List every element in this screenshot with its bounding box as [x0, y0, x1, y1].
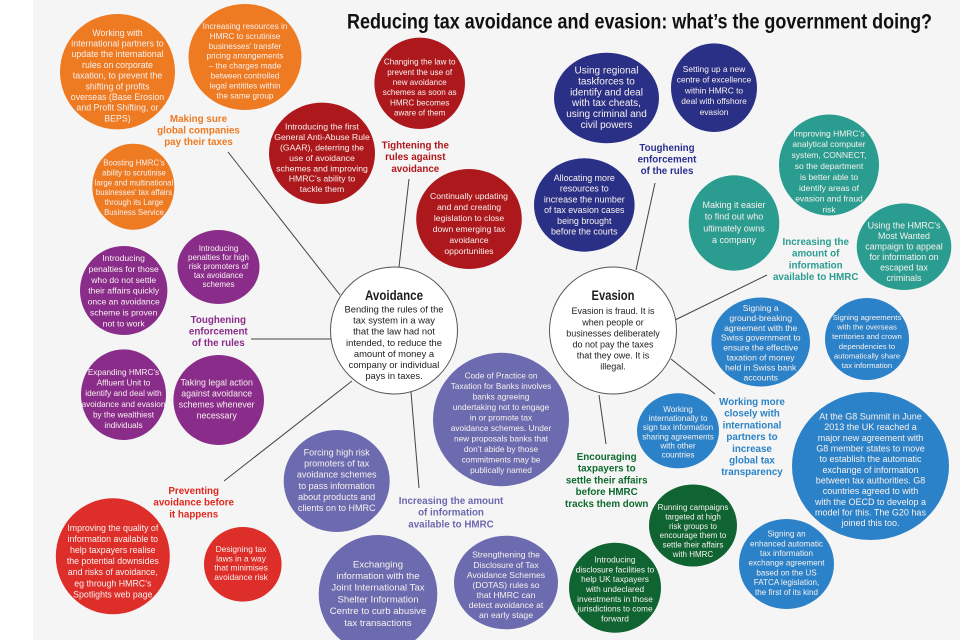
periwinkle bubble: code of practice: banks agreeing — [473, 391, 530, 401]
heading: increasing information (avoidance): of information — [418, 508, 484, 519]
teal bubble: most wanted: escaped tax — [880, 262, 928, 272]
blue bubble: FATCA: based on the US — [756, 568, 817, 577]
blue bubble: swiss agreement: taxation of money — [727, 352, 795, 362]
blue bubble: FATCA: Signing an — [767, 530, 806, 539]
periwinkle bubble: JITSIC: Exchanging — [353, 559, 403, 570]
bright red bubble: designing tax laws: that minimises — [214, 563, 268, 573]
periwinkle bubble: code of practice: Taxation for Banks involves — [451, 381, 551, 391]
central circle: avoidance — [330, 267, 458, 394]
orange bubble: transfer pricing: businesses’ transfer — [209, 42, 282, 51]
blue bubble: overseas territories: with the overseas — [836, 323, 897, 332]
central circle: avoidance: Bending the rules of the — [344, 304, 444, 314]
periwinkle bubble: forcing promoters: avoidance schemes — [297, 470, 377, 480]
central circle: avoidance: pays in taxes. — [365, 370, 423, 381]
heading: tightening the rules against avoidance: avoidance — [391, 164, 440, 175]
heading: working more closely with international partners: closely with — [724, 409, 780, 420]
heading: toughening enforcement (evasion): Toughening — [639, 143, 695, 154]
navy bubble: allocating resources: being brought — [557, 216, 612, 226]
dark red bubble: changing the law: aware of them — [394, 109, 446, 118]
dark red bubble: GAAR: General Anti-Abuse Rule — [274, 132, 370, 142]
green bubble: disclosure facilities: jurisdictions to come — [576, 604, 653, 614]
bright red bubble: designing tax laws: Designing tax — [216, 544, 267, 554]
orange bubble: transfer pricing: Increasing resources in — [203, 22, 288, 31]
purple bubble: legal action: against avoidance — [181, 388, 252, 398]
heading: toughening enforcement (evasion): of the rules — [641, 166, 694, 177]
periwinkle bubble: JITSIC: Shelter Information — [337, 594, 419, 605]
periwinkle bubble: DOTAS: Strengthening the — [472, 550, 540, 560]
heading: toughening enforcement (evasion): enforcement — [638, 155, 697, 166]
dark red bubble: changing the law: new avoidance — [393, 78, 447, 87]
blue bubble: information sharing: sharing agreements — [642, 432, 714, 441]
teal bubble: most wanted — [857, 203, 951, 290]
blue bubble: overseas territories: Signing agreements — [833, 313, 901, 322]
dark red bubble: changing the law: Changing the law to — [384, 58, 456, 67]
purple bubble: affluent unit: by the wealthiest — [93, 410, 155, 419]
heading: increasing information (evasion): amount of — [792, 249, 840, 260]
bright red bubble: designing tax laws: avoidance risk — [214, 572, 269, 582]
central circle: avoidance: amount of money a — [354, 348, 435, 359]
blue bubble: swiss agreement: ensure the effective — [723, 343, 798, 353]
connector: tightening the rules — [399, 179, 409, 267]
navy bubble: regional taskforces — [554, 53, 659, 143]
periwinkle bubble: code of practice: Code of Practice on — [465, 370, 538, 380]
blue bubble: information sharing: with other — [659, 441, 696, 450]
heading: encouraging taxpayers to settle: tracks them down — [565, 499, 648, 510]
heading: preventing avoidance before it happens: Preventing — [168, 486, 219, 497]
blue bubble: information sharing: internationally to — [649, 414, 708, 423]
heading: increasing information (avoidance): Increasing the amount — [399, 496, 504, 507]
central circle: evasion: illegal. — [600, 362, 626, 372]
blue bubble: FATCA: exchange agreement — [748, 559, 825, 568]
heading: making sure global companies pay their taxes: pay their taxes — [164, 137, 233, 148]
orange bubble: transfer pricing: pricing arrangements — [207, 52, 283, 61]
dark red bubble: changing the law — [374, 38, 465, 129]
periwinkle bubble: DOTAS: (DOTAS) rules so — [472, 580, 540, 590]
periwinkle bubble: forcing promoters: clients on to HMRC — [298, 503, 376, 513]
dark red bubble: GAAR: use of avoidance — [289, 153, 355, 163]
central circle: evasion: when people or — [581, 317, 644, 327]
periwinkle bubble: DOTAS: Disclosure of Tax — [473, 560, 539, 570]
heading: encouraging taxpayers to settle: Encouraging — [577, 452, 637, 463]
orange bubble: international rules: BEPS) — [104, 113, 131, 123]
green bubble: disclosure facilities: disclosure facilities to — [576, 564, 655, 574]
periwinkle bubble: code of practice: new proposals banks that — [454, 433, 549, 443]
orange bubble: transfer pricing: the same group — [217, 91, 274, 100]
heading: tightening the rules against avoidance: rules against — [385, 152, 446, 163]
central circle: evasion: that they owe. It is — [577, 351, 650, 361]
teal bubble: connect: risk — [822, 205, 836, 215]
blue bubble: overseas territories: dependencies to — [839, 342, 895, 351]
navy bubble: regional taskforces: using criminal and — [566, 109, 647, 120]
periwinkle bubble: JITSIC: tax transactions — [344, 618, 412, 629]
heading: encouraging taxpayers to settle: settle their affairs — [566, 475, 648, 486]
connector: international partners — [671, 359, 715, 394]
orange bubble: transfer pricing — [188, 4, 302, 110]
blue bubble: overseas territories: tax information — [842, 361, 892, 370]
teal bubble: most wanted: for information on — [869, 252, 939, 262]
purple bubble: affluent unit: Affluent Unit to — [97, 379, 151, 388]
orange bubble: large business service: large and multinational — [95, 178, 173, 187]
heading: toughening enforcement (avoidance): of the rules — [192, 338, 245, 349]
dark red bubble: updating legislation: avoidance — [449, 235, 489, 245]
periwinkle bubble: code of practice: undertaking not to engage — [453, 402, 550, 412]
blue bubble: swiss agreement: ground-breaking — [729, 313, 792, 323]
green bubble: disclosure facilities — [569, 543, 661, 633]
blue bubble: FATCA: the first of its kind — [755, 588, 818, 597]
dark red bubble: GAAR — [269, 103, 375, 204]
blue bubble: overseas territories: territories and crown — [832, 332, 902, 341]
bright red bubble: quality of information: Improving the quality of — [67, 523, 159, 533]
periwinkle bubble: code of practice — [433, 353, 569, 486]
purple bubble: penalties for promoters: penalties for high — [188, 253, 249, 262]
central circle: avoidance: tax system in a way — [353, 315, 435, 326]
heading: working more closely with international partners: increase — [732, 444, 772, 455]
periwinkle bubble: forcing promoters: promoters of tax — [304, 459, 370, 469]
connector: encouraging taxpayers — [599, 395, 606, 444]
orange bubble: transfer pricing: legal entitites within — [210, 81, 281, 90]
periwinkle bubble: JITSIC: Joint International Tax — [331, 583, 425, 594]
green bubble: disclosure facilities: investments in those — [577, 594, 653, 604]
orange bubble: international rules — [60, 14, 175, 129]
purple bubble: penalties for promoters: Introducing — [199, 244, 238, 253]
dark red bubble: GAAR: tackle them — [300, 184, 344, 194]
orange bubble: transfer pricing: – the charges made — [209, 62, 282, 71]
dark red bubble: GAAR: (GAAR), deterring the — [280, 142, 364, 152]
bright red bubble: quality of information: Spotlights web page — [73, 589, 153, 599]
bright red bubble: quality of information: and risks of avoidance, — [68, 567, 158, 577]
connector: toughening enforcement evasion — [636, 183, 655, 270]
connector: preventing avoidance — [224, 381, 352, 481]
navy bubble: regional taskforces: civil powers — [581, 120, 632, 131]
purple bubble: affluent unit: individuals — [104, 421, 143, 430]
navy bubble: regional taskforces: taskforces to — [578, 76, 635, 87]
dark red bubble: updating legislation: and and creating — [437, 202, 501, 212]
central circle: evasion: Evasion — [592, 288, 634, 303]
dark red bubble: changing the law: prevent the use of — [387, 68, 453, 77]
orange bubble: international rules: shifting of profits — [85, 81, 150, 91]
orange bubble: large business service — [92, 144, 174, 230]
navy bubble: regional taskforces: with tax cheats, — [571, 98, 641, 109]
green bubble: disclosure facilities: forward — [601, 613, 629, 623]
teal bubble: ownership — [689, 175, 779, 271]
bright red bubble: quality of information: help taxpayers realise — [70, 545, 156, 555]
teal bubble: connect: system, CONNECT, — [791, 150, 867, 160]
blue bubble: information sharing — [637, 393, 719, 468]
blue bubble: overseas territories: automatically share — [834, 351, 900, 360]
purple bubble: affluent unit: identify and deal with — [85, 389, 162, 398]
teal bubble: connect: is better able to — [800, 172, 858, 182]
periwinkle bubble: DOTAS: that HMRC can — [477, 590, 536, 600]
dark red bubble: updating legislation: Continually updating — [430, 191, 508, 201]
green bubble: disclosure facilities: Introducing — [594, 555, 636, 565]
teal bubble: connect: analytical computer — [792, 139, 866, 149]
orange bubble: large business service: Boosting HMRC’s — [103, 158, 165, 168]
blue bubble: information sharing: countries — [662, 450, 694, 460]
navy bubble: allocating resources: Allocating more — [554, 173, 615, 183]
purple bubble: penalties for promoters: schemes — [202, 280, 235, 289]
periwinkle bubble: forcing promoters: to pass information — [299, 481, 375, 491]
periwinkle bubble: code of practice: in or promote tax — [470, 412, 533, 422]
green bubble: campaigns: with HMRC — [672, 550, 713, 559]
heading: working more closely with international partners: international — [723, 420, 782, 431]
dark red bubble: updating legislation: legislation to close — [434, 213, 504, 223]
periwinkle bubble: code of practice: commitments may be — [462, 454, 541, 464]
blue bubble: G8 summit: between tax authorities. G8 — [816, 476, 925, 486]
purple bubble: legal action: necessary — [197, 410, 237, 420]
navy bubble: centre of excellence: deal with offshore — [681, 96, 747, 106]
connector: increasing information avoidance — [411, 392, 419, 488]
blue bubble: G8 summit: At the G8 Summit in June — [819, 412, 922, 422]
connector: making sure global companies — [228, 152, 340, 295]
orange bubble: international rules: Working with — [92, 28, 143, 38]
purple bubble: legal action: Taking legal action — [181, 377, 253, 387]
blue bubble: G8 summit: joined this too. — [840, 518, 900, 528]
heading: preventing avoidance before it happens: avoidance before — [153, 498, 235, 509]
teal bubble: connect: Improving HMRC’s — [793, 128, 865, 138]
blue bubble: G8 summit: exchange of information — [822, 465, 919, 475]
heading: making sure global companies pay their taxes: Making sure — [170, 114, 228, 125]
bright red bubble: quality of information — [56, 498, 170, 614]
green bubble: disclosure facilities: with undeclared — [585, 584, 644, 594]
green bubble: campaigns: targeted at high — [665, 512, 721, 521]
orange bubble: international rules: rules on corporate — [82, 60, 153, 70]
blue bubble: G8 summit: countries agreed to with — [823, 486, 918, 496]
purple bubble: penalties for not settling: once an avoidance — [88, 297, 160, 307]
blue bubble: G8 summit: major new agreement with — [818, 433, 923, 443]
navy bubble: centre of excellence: Setting up a new — [683, 64, 746, 74]
teal bubble: most wanted: Most Wanted — [878, 231, 930, 241]
dark red bubble: changing the law: schemes as soon as — [383, 88, 457, 97]
bright red bubble: quality of information: eg through HMRC’s — [74, 578, 152, 588]
heading: preventing avoidance before it happens: it happens — [169, 509, 219, 520]
blue bubble: FATCA: tax information — [760, 549, 813, 558]
blue bubble: G8 summit: to establish the automatic — [819, 454, 922, 464]
green bubble: campaigns: settle their affairs — [663, 541, 723, 550]
orange bubble: international rules: and Profit Shifting, or — [76, 103, 159, 113]
blue bubble: information sharing: sign tax information — [643, 423, 713, 432]
teal bubble: ownership: ultimately owns — [703, 223, 765, 233]
purple bubble: affluent unit: avoidance and evasion — [82, 400, 166, 409]
blue bubble: G8 summit — [792, 392, 949, 540]
navy bubble: centre of excellence: centre of excellence — [677, 75, 752, 85]
green bubble: disclosure facilities: help UK taxpayers — [581, 574, 649, 584]
blue bubble: swiss agreement: agreement with the — [724, 323, 797, 333]
central circle: evasion: Evasion is fraud. It is — [571, 306, 655, 316]
purple bubble: penalties for not settling: scheme is proven — [90, 308, 158, 318]
purple bubble: penalties for not settling: not to work — [103, 318, 145, 328]
purple bubble: penalties for promoters: tax avoidance — [194, 271, 244, 280]
teal bubble: ownership: to find out who — [705, 212, 763, 222]
connector: increasing information evasion — [675, 275, 767, 320]
blue bubble: swiss agreement: Swiss government to — [721, 333, 801, 343]
teal bubble: most wanted: campaign to appeal — [865, 242, 943, 252]
navy bubble: allocating resources — [534, 158, 635, 252]
blue bubble: G8 summit: model for this. The G20 has — [815, 508, 926, 518]
heading: toughening enforcement (avoidance): enforcement — [189, 326, 248, 338]
teal bubble: connect: so the department — [795, 161, 864, 171]
heading: increasing information (avoidance): available to HMRC — [408, 519, 494, 530]
heading: working more closely with international partners: global tax — [729, 456, 775, 466]
navy bubble: centre of excellence: evasion — [700, 107, 729, 117]
teal bubble: ownership: a company — [712, 235, 757, 245]
blue bubble: information sharing: Working — [663, 405, 693, 414]
purple bubble: affluent unit — [81, 349, 166, 440]
purple bubble: penalties for not settling: their affairs quickly — [88, 286, 160, 296]
blue bubble: G8 summit: with the OECD to develop a — [814, 497, 926, 507]
dark red bubble: changing the law: HMRC becomes — [390, 98, 449, 107]
orange bubble: large business service: through its Large — [105, 198, 163, 207]
heading: working more closely with international partners: partners to — [726, 432, 778, 443]
orange bubble: large business service: Business Service — [104, 208, 164, 217]
teal bubble: most wanted: Using the HMRC’s — [868, 220, 941, 230]
navy bubble: centre of excellence: within HMRC to — [684, 85, 743, 95]
central circle: avoidance: Avoidance — [365, 288, 423, 303]
purple bubble: affluent unit: Expanding HMRC’s — [88, 368, 159, 377]
navy bubble: centre of excellence — [671, 43, 757, 132]
purple bubble: legal action — [173, 355, 264, 445]
dark red bubble: updating legislation: opportunities — [444, 246, 494, 256]
blue bubble: swiss agreement: accounts — [743, 372, 778, 382]
periwinkle bubble: forcing promoters: Forcing high risk — [304, 448, 370, 458]
orange bubble: international rules: taxation, to prevent the — [73, 71, 162, 81]
bright red bubble: designing tax laws — [204, 527, 282, 602]
periwinkle bubble: code of practice: avoidance schemes. Under — [451, 423, 552, 433]
periwinkle bubble: DOTAS — [454, 536, 558, 629]
navy bubble: allocating resources: of tax evasion cases — [544, 205, 625, 215]
connector: toughening enforcement avoidance — [251, 338, 331, 340]
green bubble: campaigns: encourage them to — [660, 531, 727, 540]
green bubble: campaigns: risk groups to — [669, 522, 718, 531]
heading: encouraging taxpayers to settle: before HMRC — [576, 487, 638, 498]
navy bubble: allocating resources: before the courts — [551, 226, 618, 236]
navy bubble: allocating resources: resources to — [560, 184, 609, 194]
central circle: avoidance: intended, to reduce the — [346, 337, 442, 348]
heading: tightening the rules against avoidance: Tightening the — [382, 140, 449, 152]
periwinkle bubble: DOTAS: Avoidance Schemes — [467, 570, 545, 580]
purple bubble: legal action: schemes whenever — [179, 399, 255, 409]
blue bubble: swiss agreement — [711, 298, 810, 386]
dark red bubble: GAAR: HMRC’s ability to — [289, 174, 355, 184]
heading: increasing information (evasion): information — [789, 260, 843, 271]
orange bubble: international rules: international partners to — [71, 38, 164, 48]
navy bubble: regional taskforces: Using regional — [575, 66, 638, 76]
heading: increasing information (evasion): Increasing the — [782, 237, 849, 248]
purple bubble: penalties for not settling: Introducing — [102, 253, 145, 263]
green bubble: campaigns: Running campaigns — [658, 503, 728, 512]
periwinkle bubble: forcing promoters — [284, 430, 390, 532]
heading: making sure global companies pay their taxes: global companies — [157, 126, 240, 136]
dark red bubble: updating legislation: down emerging tax — [433, 224, 506, 234]
periwinkle bubble: JITSIC: Centre to curb abusive — [330, 606, 426, 617]
orange bubble: large business service: ability to scrutinise — [102, 168, 166, 177]
blue bubble: G8 summit: 2013 the UK reached a — [824, 422, 917, 432]
purple bubble: penalties for promoters — [178, 230, 260, 304]
heading: working more closely with international partners: Working more — [719, 397, 785, 408]
navy bubble: regional taskforces: identify and deal — [570, 87, 643, 98]
dark red bubble: GAAR: Introducing the first — [285, 122, 360, 132]
heading: working more closely with international partners: transparency — [721, 467, 783, 478]
blue bubble: overseas territories — [825, 298, 909, 380]
dark red bubble: GAAR: schemes and improving — [276, 163, 368, 173]
periwinkle bubble: code of practice: publically named — [470, 465, 532, 475]
teal bubble: most wanted: criminals — [886, 273, 922, 283]
orange bubble: large business service: businesses’ tax affairs — [96, 188, 172, 197]
bright red bubble: designing tax laws: laws in a way — [216, 553, 267, 563]
green bubble: campaigns — [649, 484, 737, 566]
central circle: evasion: do not pay the taxes — [572, 340, 654, 350]
blue bubble: FATCA: FATCA legislation, — [754, 578, 819, 587]
teal bubble: ownership: Making it easier — [702, 200, 766, 210]
bright red bubble: quality of information: information available to — [68, 534, 158, 544]
heading: encouraging taxpayers to settle: taxpayers to — [578, 464, 636, 475]
central circle: avoidance: company or individual — [349, 359, 439, 370]
teal bubble: connect — [779, 114, 879, 216]
blue bubble: G8 summit: G8 member states to move — [816, 444, 925, 454]
periwinkle bubble: DOTAS: an early stage — [479, 610, 533, 620]
central circle: avoidance: that the law had not — [353, 326, 435, 337]
periwinkle bubble: forcing promoters: about products and — [298, 492, 375, 502]
heading: increasing information (evasion): available to HMRC — [773, 272, 858, 283]
central circle: evasion: businesses deliberately — [566, 328, 660, 338]
blue bubble: swiss agreement: held in Swiss bank — [725, 362, 797, 372]
orange bubble: transfer pricing: between controlled — [211, 72, 280, 80]
purple bubble: penalties for not settling — [80, 246, 167, 335]
periwinkle bubble: code of practice: don’t abide by those — [464, 444, 539, 454]
navy bubble: allocating resources: increase the number — [544, 194, 625, 204]
blue bubble: FATCA: enhanced automatic — [750, 539, 823, 548]
purple bubble: penalties for promoters: risk promoters of — [189, 262, 249, 271]
blue bubble: FATCA — [739, 519, 834, 609]
heading: toughening enforcement (avoidance): Toughening — [191, 315, 246, 326]
dark red bubble: updating legislation — [416, 169, 522, 269]
orange bubble: international rules: update the international — [72, 49, 164, 59]
teal bubble: connect: evasion and fraud — [795, 194, 863, 204]
periwinkle bubble: DOTAS: detect avoidance at — [469, 600, 544, 610]
periwinkle bubble: JITSIC — [319, 535, 437, 640]
central circle: evasion — [550, 267, 676, 394]
blue bubble: swiss agreement: Signing a — [743, 303, 779, 313]
purple bubble: penalties for not settling: penalties for those — [89, 264, 159, 274]
periwinkle bubble: JITSIC: information with the — [336, 571, 420, 582]
bright red bubble: quality of information: the potential downsides — [67, 556, 159, 566]
teal bubble: connect: identify areas of — [799, 183, 860, 193]
orange bubble: international rules: overseas (Base Erosion — [71, 92, 164, 102]
orange bubble: transfer pricing: HMRC to scrutinise — [210, 32, 281, 41]
purple bubble: penalties for not settling: who do not settle — [90, 275, 156, 285]
